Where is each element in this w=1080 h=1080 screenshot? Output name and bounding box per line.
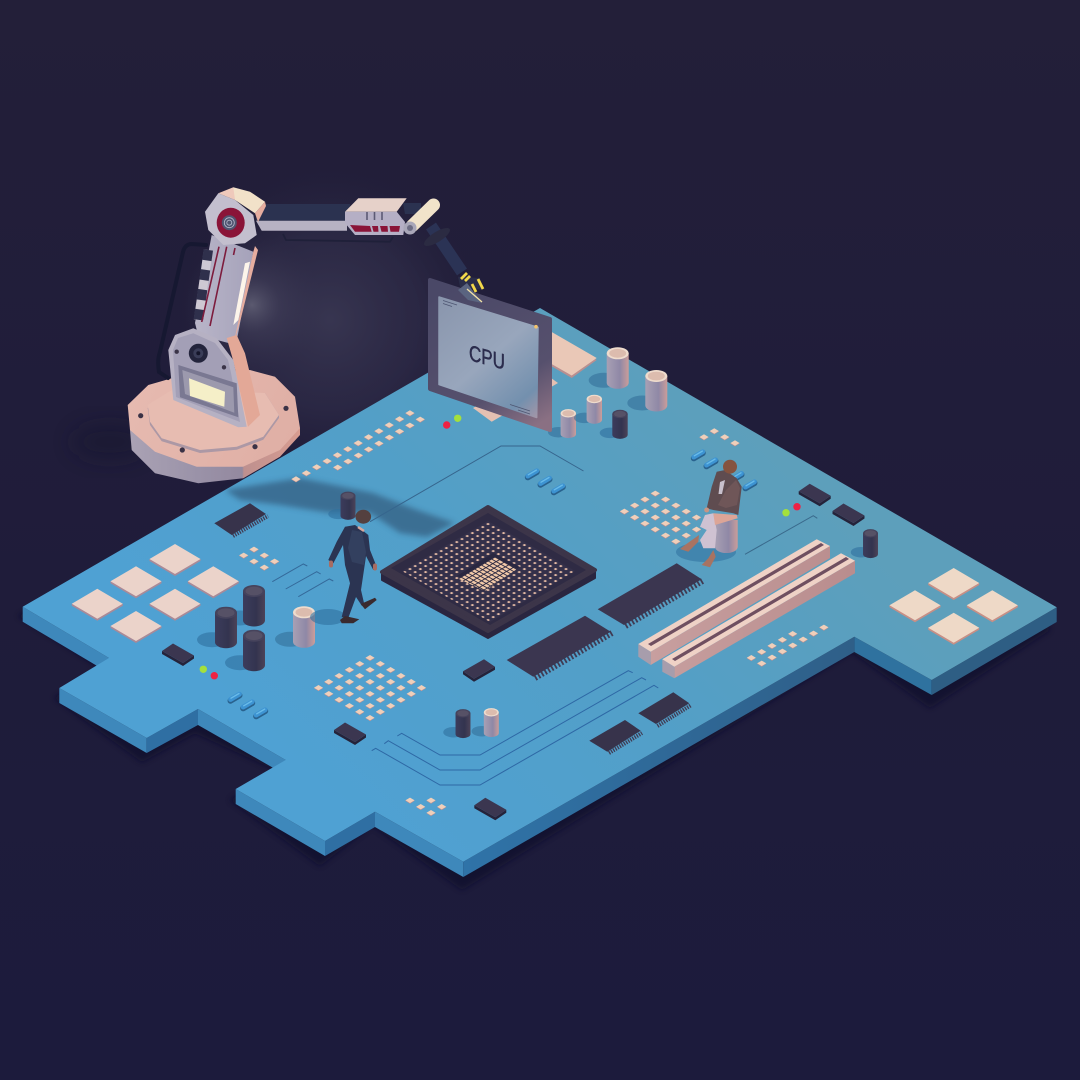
slot two: [662, 553, 855, 678]
card face: [439, 297, 538, 418]
shirt: [718, 480, 725, 494]
housing plate: [173, 333, 240, 422]
skirt: [700, 513, 717, 548]
contact pads: left six: [72, 544, 239, 643]
solder point grids: [239, 410, 828, 816]
memory slots: [638, 539, 855, 678]
small print on card: [443, 300, 530, 414]
upper arm: [195, 235, 258, 345]
robot base disc: [128, 370, 300, 483]
board drop shadow: [18, 320, 1050, 890]
glowing screen: [189, 378, 225, 407]
slot one: [638, 539, 830, 665]
seat cylinder: [676, 520, 738, 562]
status LEDs: [200, 415, 801, 679]
suit: [328, 525, 377, 618]
thigh: [713, 513, 738, 525]
shoes: [340, 598, 377, 623]
jacket highlight: [348, 530, 366, 565]
capacitors: [197, 492, 878, 738]
head: [723, 460, 737, 474]
contact pads: right four: [890, 568, 1018, 645]
socket recess: [391, 513, 586, 625]
camera lens: [189, 344, 208, 363]
man shadow: [310, 609, 346, 625]
socket body: [382, 570, 595, 638]
feet: [680, 535, 716, 567]
raised step: [148, 393, 279, 453]
shoulder joint: [205, 187, 266, 245]
housing screws: [174, 350, 226, 369]
circuit board: [23, 308, 1057, 877]
hands: [331, 562, 375, 568]
CPU socket: [382, 507, 595, 638]
power cable: [158, 244, 206, 378]
top-right capacitors: [548, 347, 667, 439]
CPU label: CPU: [469, 340, 505, 375]
die pads: [459, 557, 517, 591]
wrist: [403, 203, 434, 234]
gripper claws: [458, 273, 483, 303]
card pin marker: [534, 325, 538, 329]
socket pin field: [402, 521, 575, 622]
robot base shadow: [72, 424, 148, 460]
base screws: [138, 406, 289, 453]
centre window: [457, 553, 520, 587]
coat lit panel: [718, 480, 740, 508]
legged chips: [214, 503, 703, 753]
forearm: [256, 204, 393, 242]
circuit traces: [272, 446, 817, 785]
coat: [707, 470, 742, 515]
card frame: [430, 280, 550, 430]
CPU card held by the gripper: [430, 280, 550, 430]
backdrop shade behind the robot arm: [170, 170, 490, 470]
robot arm: [128, 187, 483, 483]
board top surface: [23, 308, 1057, 862]
hand: [704, 508, 709, 512]
robot shadow on board: [225, 478, 455, 537]
arm glow: [170, 225, 340, 395]
gripper shaft: [422, 225, 462, 272]
lower housing front: [168, 328, 247, 427]
elbow box: [345, 198, 407, 235]
inner panel: [178, 365, 238, 417]
seated woman on capacitor: [676, 460, 742, 567]
walking businessman: [310, 510, 377, 625]
pink plates behind the CPU card: [473, 332, 597, 422]
collar: [358, 527, 364, 531]
blue resistors: [230, 451, 754, 716]
head: [356, 510, 371, 524]
board side faces: [23, 607, 1057, 877]
small SOP chips: [162, 484, 864, 820]
lower housing side: [227, 335, 260, 427]
